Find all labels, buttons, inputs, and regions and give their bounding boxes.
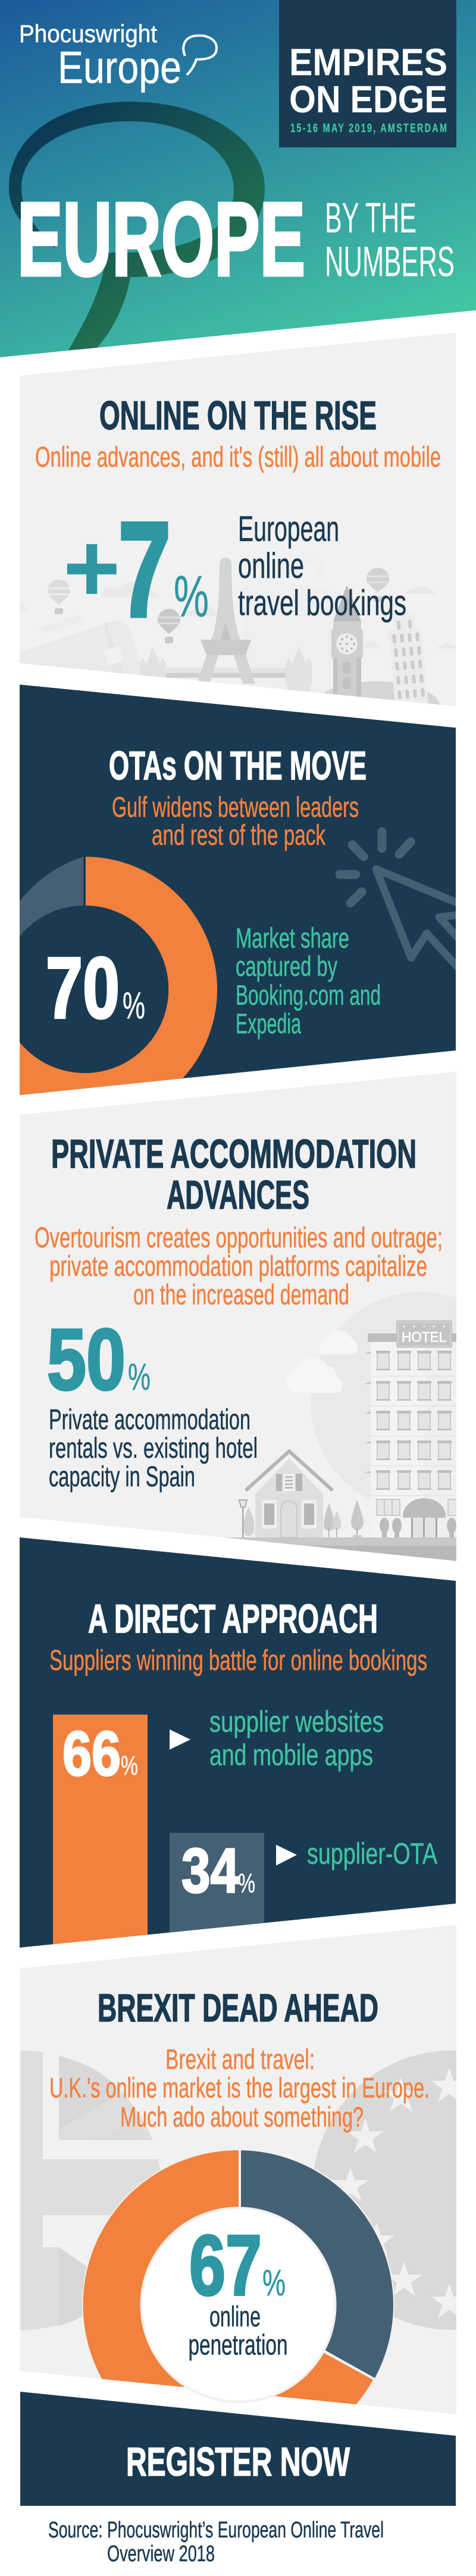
- right suitcase: [243, 553, 344, 707]
- stat: 66%: %: [121, 1750, 138, 1781]
- stat: +7%: +: [63, 513, 120, 622]
- subheading: [49, 2043, 430, 2132]
- stat: 34%: 34: [181, 1836, 239, 1906]
- logo: Phocuswright Europe: [19, 20, 217, 93]
- source note: Overview 2018: [107, 2542, 215, 2566]
- stat label: captured by: [236, 950, 337, 982]
- hotel building: [364, 1333, 458, 1539]
- stat label: travel bookings: [238, 583, 406, 623]
- panel: online on the rise: [20, 333, 456, 734]
- stat label: [188, 2301, 288, 2361]
- stat label: [236, 922, 381, 1039]
- stat: +7%: 7: [118, 494, 171, 644]
- illustration: hotel and house: [226, 1320, 456, 1561]
- stat label: online: [238, 546, 304, 586]
- stat label: penetration: [188, 2329, 288, 2361]
- left suitcase: [25, 622, 123, 673]
- ground: [226, 1537, 464, 1546]
- stat label: European: [238, 509, 339, 549]
- label: supplier websites: supplier websites: [209, 1705, 384, 1738]
- EU flag: [314, 2050, 456, 2330]
- donut chart: 70%: [20, 857, 218, 1095]
- hotel sign: [396, 1320, 452, 1348]
- arrow: [276, 1845, 297, 1866]
- subheading: Gulf widens between leaders: [112, 792, 359, 823]
- event badge: Empires on Edge: 15-16 MAY 2019, AMSTERDAM: [290, 121, 447, 135]
- title: Europe by the numbers: BY THE: [325, 195, 416, 242]
- stat label: [49, 1404, 258, 1493]
- bridge: [166, 668, 286, 678]
- stat: 50%: %: [128, 1357, 151, 1398]
- subheading: and rest of the pack: [152, 820, 326, 851]
- donut chart: 67%: [82, 2150, 394, 2404]
- stat: 67%: 67: [189, 2218, 262, 2313]
- subheading: Much ado about something?: [120, 2101, 364, 2132]
- heading: ADVANCES: [167, 1172, 309, 1218]
- subheading: Brexit and travel:: [165, 2043, 315, 2075]
- title: Europe by the numbers: EUROPE: [17, 181, 305, 298]
- street lamp and trees: [239, 1500, 364, 1537]
- label: supplier websites: and mobile apps: [209, 1738, 373, 1772]
- heading: [51, 1131, 416, 1218]
- UK flag: [20, 2050, 161, 2330]
- clouds: [20, 581, 456, 649]
- logo: Phocuswright Europe: Europe: [58, 43, 181, 93]
- stat label: rentals vs. existing hotel: [49, 1433, 258, 1464]
- stat: 70%: 70: [46, 939, 120, 1036]
- stat label: Market share: [236, 922, 349, 954]
- subheading: [35, 1222, 443, 1311]
- stat: 50%: 50: [47, 1311, 126, 1408]
- illustration: European landmarks: [25, 558, 440, 705]
- call to action: register now: [20, 2392, 456, 2506]
- label: supplier websites: [209, 1705, 384, 1772]
- event badge: Empires on Edge: [279, 0, 456, 147]
- stat: 70%: %: [123, 985, 145, 1027]
- icon: click cursor: [336, 828, 456, 970]
- background: UK and EU flag circles: [20, 2050, 456, 2330]
- clouds: [311, 1330, 358, 1393]
- stat: +7%: %: [174, 564, 209, 629]
- call to action: register now: REGISTER NOW: [126, 2439, 350, 2484]
- hotel sign: HOTEL: [402, 1329, 446, 1345]
- stat: 34%: %: [238, 1868, 255, 1898]
- leaning tower of Pisa: [392, 619, 428, 704]
- stat: 67%: %: [262, 2263, 286, 2304]
- Eiffel tower: [197, 558, 255, 684]
- stat label: online: [209, 2301, 261, 2333]
- event badge: Empires on Edge: ON EDGE: [289, 78, 447, 121]
- stat label: Expedia: [236, 1008, 302, 1039]
- subheading: on the increased demand: [133, 1279, 349, 1311]
- panel: a direct approach: [20, 1537, 456, 1952]
- panel: OTAs on the move: [20, 685, 456, 1095]
- house: [246, 1451, 333, 1537]
- label: supplier-OTA: supplier-OTA: [307, 1837, 437, 1870]
- stat label: Private accommodation: [49, 1404, 250, 1436]
- icon: large speech bubble: [9, 102, 265, 350]
- stat label: Booking.com and: [236, 979, 381, 1011]
- dome: [324, 681, 440, 705]
- stat: +7%: [63, 494, 209, 644]
- event badge: Empires on Edge: EMPIRES: [289, 40, 447, 83]
- header panel: [0, 0, 476, 357]
- subheading: [112, 792, 359, 851]
- Big Ben: [331, 585, 363, 697]
- donut centre: [140, 2207, 337, 2403]
- stat: 66%: 66: [62, 1719, 121, 1789]
- stat label: [238, 509, 406, 623]
- logo: Phocuswright Europe: Phocuswright: [19, 20, 157, 48]
- panel: private accommodation advances: [20, 1072, 476, 1569]
- bridge towers: [140, 647, 312, 692]
- bar chart: [53, 1715, 264, 1952]
- source note: [48, 2518, 384, 2566]
- stat label: capacity in Spain: [49, 1461, 195, 1493]
- hot air balloons: [48, 580, 70, 614]
- arrow: [170, 1729, 190, 1750]
- panel: brexit dead ahead: [20, 1925, 456, 2414]
